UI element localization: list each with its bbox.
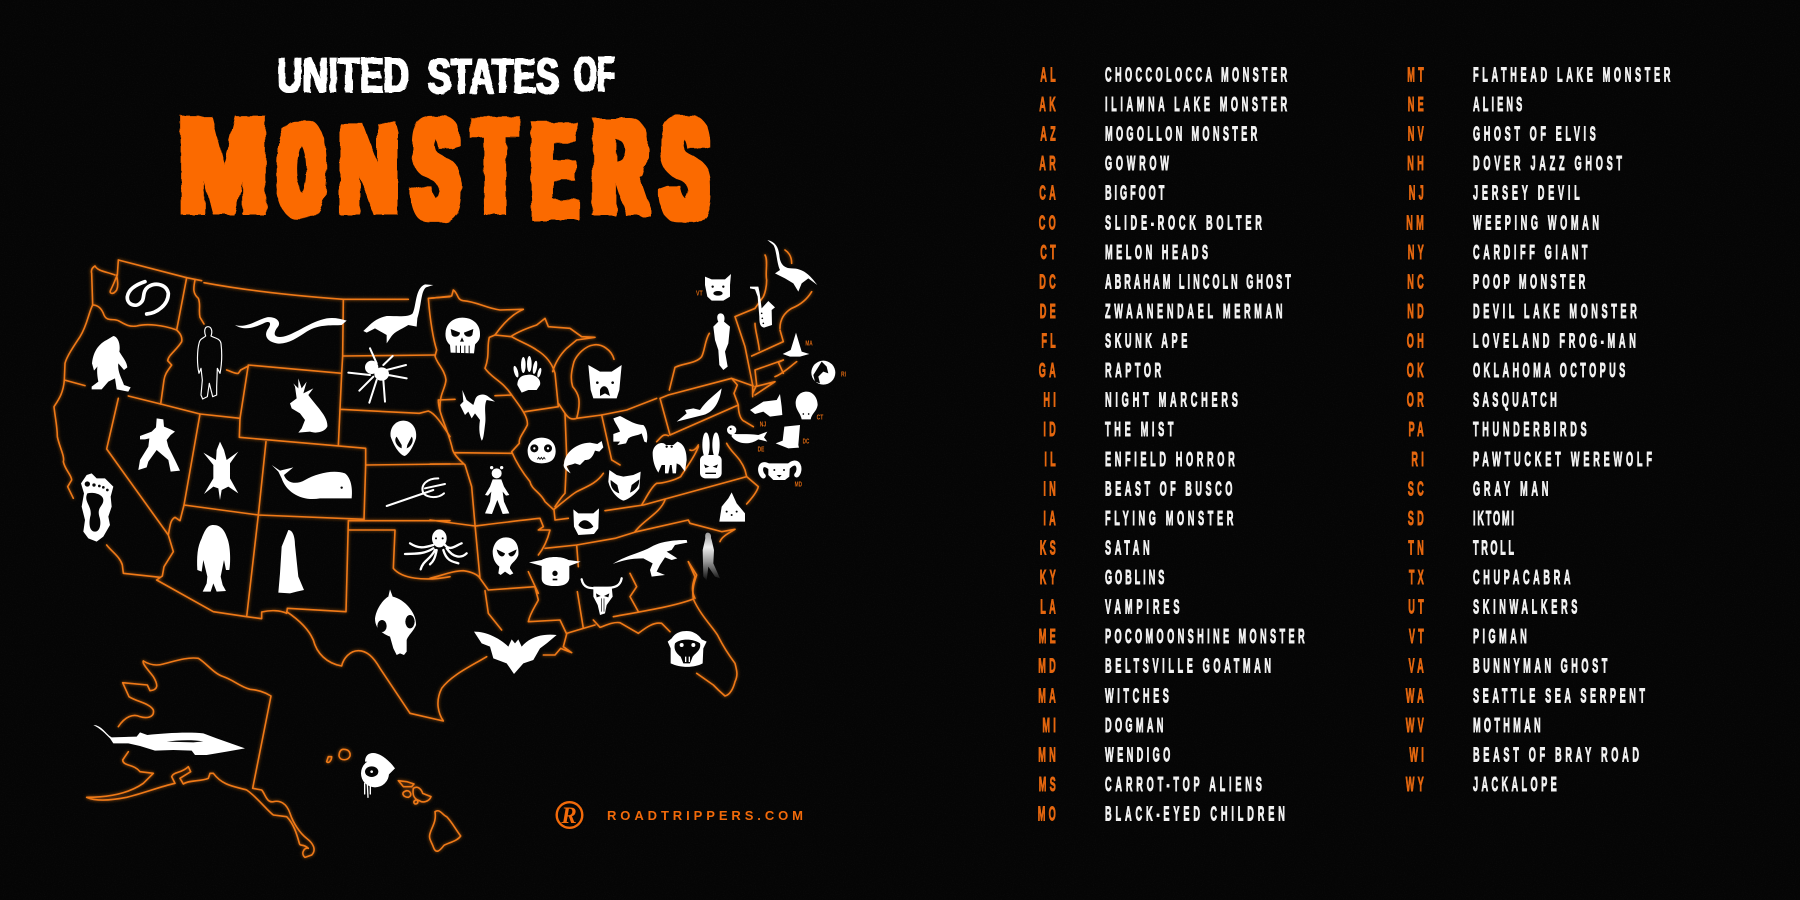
row: VA: VA (1408, 656, 1427, 678)
icon: skunk ape (668, 631, 707, 667)
title line: United States of: OF (574, 48, 615, 102)
icon: the mist outline figure (197, 327, 222, 399)
row: NJ (1409, 183, 1580, 205)
row: GA: RAPTOR (1105, 360, 1161, 382)
map: state outlines (54, 250, 812, 857)
row: SD (1408, 508, 1514, 530)
icon: flying monster (460, 390, 495, 441)
letters M and N: N (339, 101, 398, 239)
title (179, 48, 706, 249)
monster icons: central and eastern states (445, 240, 846, 615)
title line: United States of: UNITED (277, 49, 409, 103)
row: HI: HI (1043, 390, 1059, 412)
row: IN: IN (1043, 479, 1059, 500)
letters M and N: M (179, 90, 268, 241)
row: PA: THUNDERBIRDS (1473, 419, 1587, 441)
row: UT: SKINWALKERS (1473, 597, 1577, 619)
row: SD: SD (1408, 508, 1427, 530)
icon: Iliamna lake monster sturgeon (93, 725, 245, 755)
row: LA: LA (1040, 597, 1059, 619)
row: AK: AK (1039, 94, 1059, 116)
row: NC (1407, 272, 1585, 294)
letters O, S, T, E, R, S: T (476, 92, 514, 241)
icon: witch hat (783, 333, 809, 357)
icon: Cardiff giant (713, 313, 730, 370)
letters M and N (179, 90, 398, 241)
row: NV (1408, 124, 1596, 146)
icon: Abraham Lincoln top hat (776, 425, 800, 448)
row: KY: KY (1040, 567, 1059, 589)
row: MN (1038, 745, 1170, 767)
row: NJ: JERSEY DEVIL (1473, 183, 1580, 205)
row: DC: ABRAHAM LINCOLN GHOST (1105, 272, 1291, 294)
icon: goblin (608, 470, 641, 501)
icon: alien head (390, 421, 416, 456)
row: MT: FLATHEAD LAKE MONSTER (1473, 65, 1670, 87)
icon: troll (573, 508, 599, 535)
row: WV: WV (1406, 715, 1427, 737)
row: WA: SEATTLE SEA SERPENT (1473, 686, 1645, 707)
row: CA (1039, 183, 1165, 205)
row: MS: CARROT-TOP ALIENS (1105, 774, 1262, 796)
row: MN: WENDIGO (1105, 745, 1170, 767)
row: ID (1043, 419, 1174, 441)
row: TX: CHUPACABRA (1473, 567, 1571, 589)
icon: Pocomoonshine monster (767, 240, 817, 292)
row: NY (1408, 242, 1588, 264)
state label: RI: RI (841, 372, 846, 379)
icon: thunderbird (677, 388, 722, 422)
state label: DE: DE (758, 447, 765, 454)
icon: jackalope (290, 378, 327, 433)
row: IL (1044, 449, 1235, 471)
icon: beast of Busco turtle (564, 441, 603, 473)
icon: Dover jazz ghost saxophone (750, 287, 775, 328)
row: WY: JACKALOPE (1473, 774, 1557, 796)
icon: slide-rock bolter whale (272, 465, 352, 499)
row: GA: GA (1039, 360, 1059, 382)
row: TN: TROLL (1473, 538, 1514, 560)
row: MI: DOGMAN (1105, 715, 1163, 737)
row: WV: MOTHMAN (1473, 715, 1541, 737)
row: GA (1039, 360, 1161, 382)
icon: chupacabra skull (375, 589, 416, 655)
icon: sasquatch (92, 336, 131, 392)
row: AR: GOWROW (1105, 153, 1169, 175)
icon: mothman (653, 442, 687, 473)
list: state monsters, column 1 (1038, 65, 1305, 826)
row: KS (1040, 538, 1150, 560)
icon: carrot-top alien (529, 557, 581, 586)
row: WV (1406, 715, 1541, 737)
row: NV: GHOST OF ELVIS (1473, 124, 1596, 146)
state label: MD: MD (795, 482, 802, 489)
row: MD: BELTSVILLE GOATMAN (1105, 656, 1271, 678)
icon: night marcher skull (361, 753, 395, 797)
state label: VT: VT (696, 291, 703, 298)
row: NM: WEEPING WOMAN (1473, 213, 1599, 234)
icon: Loveland frog (613, 416, 647, 445)
state label: DC: DC (803, 438, 809, 445)
icon: vampire bat (474, 632, 557, 674)
row: KS: SATAN (1105, 538, 1150, 560)
row: IN: BEAST OF BUSCO (1105, 479, 1232, 500)
row: NM (1406, 213, 1599, 234)
row: FL: SKUNK APE (1105, 331, 1187, 353)
row: DC: DC (1039, 272, 1059, 294)
row: ID: THE MIST (1105, 419, 1174, 441)
row: TN (1408, 538, 1514, 560)
row: KY (1040, 567, 1164, 589)
icon: beast of Bray Road paw (513, 356, 542, 393)
row: DE: DE (1040, 301, 1059, 323)
row: NY: NY (1408, 242, 1427, 264)
monster icons: western states (81, 282, 467, 593)
row: TN: TN (1408, 538, 1427, 560)
row: CA: CA (1039, 183, 1059, 205)
row: DE: ZWAANENDAEL MERMAN (1105, 301, 1283, 323)
state label: MA: MA (805, 340, 813, 347)
icon: gowrow (493, 537, 518, 575)
icon: Jersey devil (750, 394, 782, 417)
state label: CT: CT (817, 414, 824, 421)
icon: Satan trident (387, 478, 445, 506)
row: WY (1406, 774, 1557, 796)
icon: Seattle sea serpent (127, 282, 168, 314)
letters O, S, T, E, R, S (280, 90, 706, 249)
row: IA: FLYING MONSTER (1105, 508, 1233, 530)
title line: United States of: STATES (428, 50, 559, 104)
row: OH: OH (1407, 331, 1427, 353)
row: OK (1407, 360, 1625, 382)
row: SC: GRAY MAN (1473, 479, 1548, 500)
row: WI: WI (1409, 745, 1427, 767)
icon: melon head (796, 392, 818, 419)
row: MA: MA (1038, 686, 1059, 707)
row: AZ: AZ (1040, 124, 1059, 146)
outlines: Texas, Alaska and Hawaii (87, 612, 487, 857)
outlines: central and eastern states (430, 250, 812, 598)
icon: Mogollon monster (197, 525, 230, 592)
row: AL: CHOCCOLOCCA MONSTER (1105, 65, 1287, 87)
row: IN (1043, 479, 1232, 500)
row: OK: OKLAHOMA OCTOPUS (1473, 360, 1625, 382)
row: IL: ENFIELD HORROR (1105, 449, 1235, 471)
row: AZ: MOGOLLON MONSTER (1105, 124, 1257, 146)
icon: Iktomi spider (348, 348, 407, 403)
row: CT (1040, 242, 1208, 264)
row: RI: PAWTUCKET WEREWOLF (1473, 449, 1652, 471)
row: PA (1408, 419, 1587, 441)
row: OR (1407, 390, 1557, 412)
row: WA: WA (1406, 686, 1427, 707)
row: CO: CO (1039, 213, 1059, 234)
icon: raptor (613, 540, 687, 577)
icon: ghost of Elvis (138, 418, 180, 472)
letters O, S, T, E, R, S: E (534, 97, 574, 246)
row: NH (1407, 153, 1622, 175)
row: KS: KS (1040, 538, 1059, 560)
row: MS: MS (1039, 774, 1059, 796)
monster icons: Louisiana and Florida (474, 631, 707, 674)
row: HI: NIGHT MARCHERS (1105, 390, 1238, 412)
row: MI (1042, 715, 1163, 737)
website text: ROADTRIPPERS.COM (607, 808, 803, 823)
row: ID: ID (1043, 419, 1059, 441)
row: MT: MT (1407, 65, 1427, 87)
row: ND: ND (1407, 301, 1427, 323)
row: OR: OR (1407, 390, 1427, 412)
monster icons: Texas, Alaska and Hawaii (93, 589, 416, 797)
row: TX: TX (1409, 567, 1427, 589)
icon: Oklahoma octopus (405, 529, 467, 569)
icon: bigfoot footprint (81, 473, 113, 542)
row: VT: PIGMAN (1473, 626, 1527, 648)
icon: bunnyman (700, 432, 722, 478)
icon: Enfield horror face (528, 438, 556, 463)
row: KY: GOBLINS (1105, 567, 1164, 589)
row: NJ: NJ (1409, 183, 1427, 205)
row: IA: IA (1043, 508, 1059, 530)
row: IA (1043, 508, 1233, 530)
row: NY: CARDIFF GIANT (1473, 242, 1588, 264)
title line: United States of (277, 48, 615, 104)
row: SC: SC (1408, 479, 1427, 500)
logo badge (557, 802, 582, 828)
row: MO: MO (1038, 804, 1059, 826)
row: WY: WY (1406, 774, 1427, 796)
row: FL: FL (1041, 331, 1059, 353)
row: RI: RI (1411, 449, 1427, 471)
row: VA: BUNNYMAN GHOST (1473, 656, 1608, 678)
row: LA (1040, 597, 1180, 619)
row: NE (1408, 94, 1522, 116)
row: NC: NC (1407, 272, 1427, 294)
icon: Flathead lake monster (235, 317, 347, 344)
row: LA: VAMPIRES (1105, 597, 1180, 619)
row: IL: IL (1044, 449, 1059, 471)
icon: weeping woman (278, 530, 304, 593)
icon: gray man (703, 533, 720, 581)
row: NE: ALIENS (1473, 94, 1522, 116)
row: VA (1408, 656, 1608, 678)
list: state monsters, column 2 (1406, 65, 1670, 796)
icon: Devil Lake monster (363, 284, 433, 343)
row: AK: ILIAMNA LAKE MONSTER (1105, 94, 1287, 116)
row: ME: POCOMOONSHINE MONSTER (1105, 626, 1305, 648)
icon: wendigo skull (445, 318, 480, 353)
row: CT: MELON HEADS (1105, 242, 1208, 264)
row: FL (1041, 331, 1187, 353)
row: MI: MI (1042, 715, 1059, 737)
row: VT (1409, 626, 1527, 648)
icon: Beltsville goatman (761, 463, 799, 480)
row: MN: MN (1038, 745, 1059, 767)
row: OH: LOVELAND FROG-MAN (1473, 331, 1636, 353)
icon: poop monster (719, 492, 745, 522)
row: OR: SASQUATCH (1473, 390, 1557, 412)
icon: dogman head (588, 365, 622, 398)
row: OK: OK (1407, 360, 1427, 382)
row: WI: BEAST OF BRAY ROAD (1473, 745, 1639, 767)
row: CT: CT (1040, 242, 1059, 264)
logo badge: R (560, 803, 577, 828)
icon: Zwaanendael merman (727, 425, 767, 443)
icon: Choccolocca cow skull (582, 578, 622, 615)
state label: NJ: NJ (760, 422, 766, 429)
outlines: southern states and Gulf coast (485, 562, 737, 696)
row: ND: DEVIL LAKE MONSTER (1473, 301, 1637, 323)
outlines: western states (54, 260, 450, 619)
title line: Monsters (179, 90, 706, 249)
row: TX (1409, 567, 1571, 589)
icon: black-eyed child (485, 466, 509, 514)
row: PA: PA (1408, 419, 1427, 441)
icon: skinwalker pelt (203, 442, 238, 500)
icon: Pawtucket werewolf moon (811, 361, 835, 385)
row: AR (1039, 153, 1169, 175)
row: UT: UT (1408, 597, 1427, 619)
row: CA: BIGFOOT (1105, 183, 1165, 205)
letters O, S, T, E, R, S: R (594, 94, 646, 242)
row: SD: IKTOMI (1473, 508, 1514, 530)
row: NV: NV (1408, 124, 1427, 146)
letters O, S, T, E, R, S: O (280, 96, 322, 242)
row: NC: POOP MONSTER (1473, 272, 1585, 294)
row: NH: NH (1407, 153, 1427, 175)
row: SC (1408, 479, 1548, 500)
row: CO: SLIDE-ROCK BOLTER (1105, 213, 1262, 234)
row: UT (1408, 597, 1577, 619)
row: NE: NE (1408, 94, 1427, 116)
row: NH: DOVER JAZZ GHOST (1473, 153, 1622, 175)
row: MA (1038, 686, 1169, 707)
row: MA: WITCHES (1105, 686, 1169, 707)
letters O, S, T, E, R, S: S (414, 90, 458, 249)
row: AL: AL (1040, 65, 1059, 87)
icon: pigman (705, 274, 731, 301)
row: ME: ME (1039, 626, 1059, 648)
row: HI (1043, 390, 1238, 412)
row: VT: VT (1409, 626, 1427, 648)
row: NM: NM (1406, 213, 1427, 234)
row: AR: AR (1039, 153, 1059, 175)
logo: Roadtrippers (557, 802, 803, 828)
row: MD: MD (1038, 656, 1059, 678)
text: S (664, 90, 706, 249)
row: MO: BLACK-EYED CHILDREN (1105, 804, 1285, 826)
